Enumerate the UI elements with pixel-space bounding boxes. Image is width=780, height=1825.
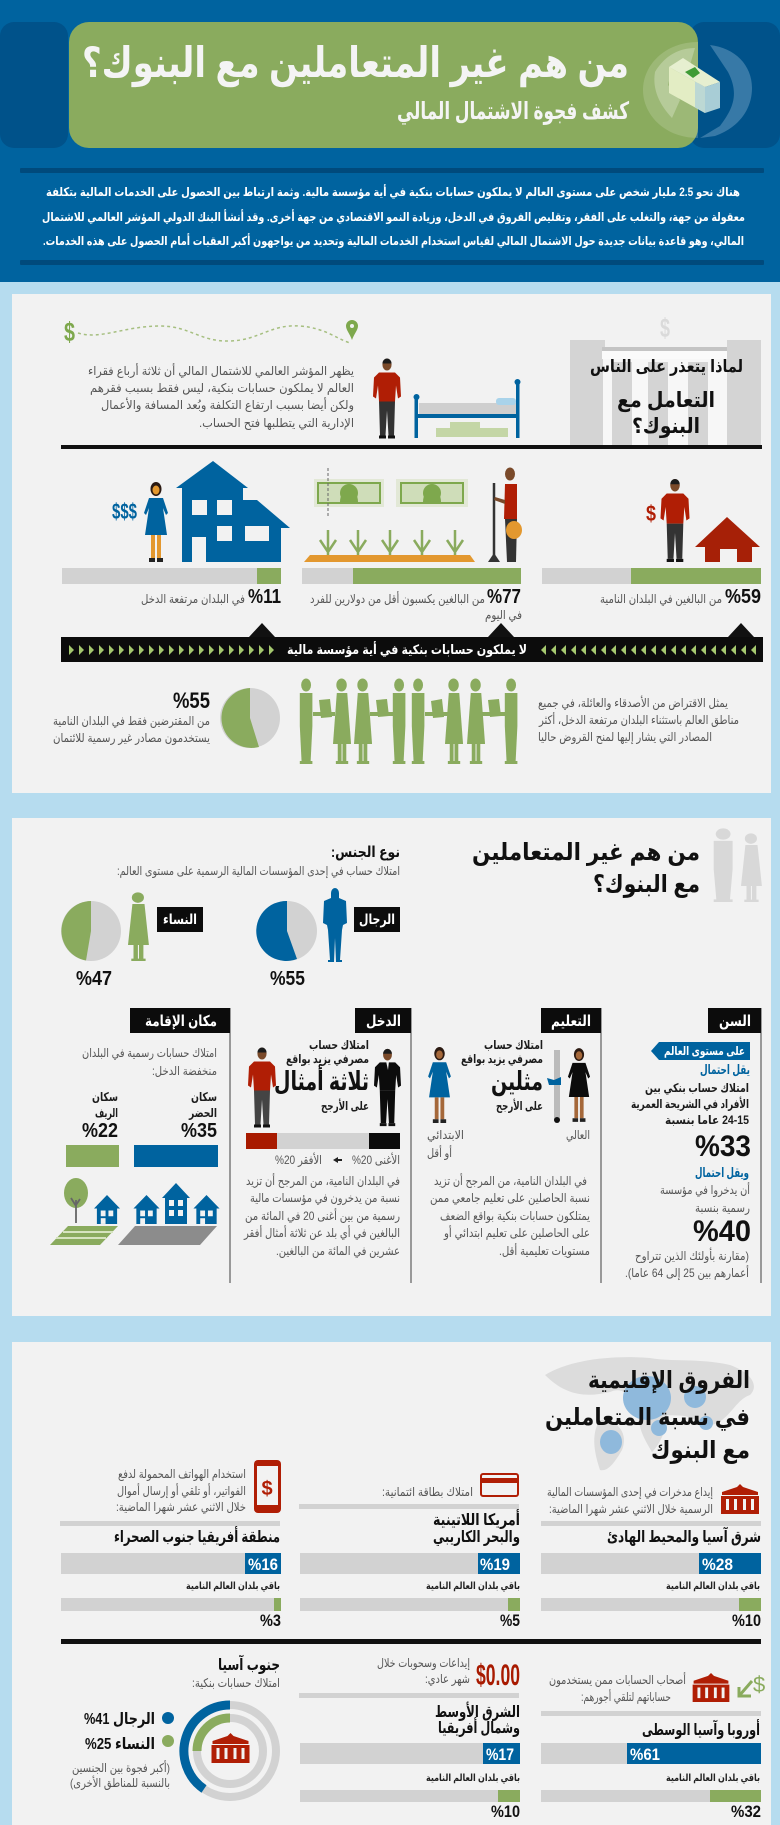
- column: residence: امتلاك حسابات رسمية في البلدان: [82, 1046, 217, 1061]
- icon: woman high income: [144, 482, 168, 562]
- column: age: %33: [695, 1130, 751, 1163]
- paragraph: borrowing from friends: يمثل الاقتراض من الأصدقاء والعائلة، في جميع: [538, 695, 728, 711]
- icon: green dollar and dashed route: [64, 317, 358, 347]
- column: income: الدخل: [366, 1013, 401, 1030]
- column: education: نسبة الحاصلين على تعليم جامعي ممن: [430, 1191, 590, 1206]
- column: age: %40: [693, 1215, 751, 1248]
- gender heading: نوع الجنس:: [331, 844, 400, 861]
- region: europe and central asia: %61: [630, 1745, 660, 1764]
- region: middle east and north africa: %10: [491, 1802, 520, 1821]
- column: age: (مقارنة بأولئك الذين تتراوح: [635, 1247, 749, 1264]
- icon: man in tuxedo: [374, 1049, 401, 1126]
- column: education: في البلدان النامية، من المرجح أن تزيد: [434, 1173, 587, 1189]
- section heading: في نسبة المتعاملين: [545, 1404, 750, 1431]
- column: residence: مكان الإقامة: [145, 1013, 217, 1030]
- icon: dollar arrow: [739, 1672, 765, 1697]
- banner: no bank accounts: لا يملكون حسابات بنكية في أية مؤسسة مالية: [287, 641, 527, 657]
- paragraph: global findex: ولكن أيضا بسبب ارتفاع التكلفة وبُعد المسافة والأعمال: [101, 397, 354, 413]
- paragraph: borrowing from friends: مناطق العالم باستثناء البلدان مرتفعة الدخل، أكثر: [538, 712, 739, 728]
- women stat: [61, 892, 203, 990]
- column: education: التعليم: [551, 1013, 591, 1030]
- column: residence: الريف: [95, 1106, 118, 1120]
- column: residence: سكان: [191, 1090, 217, 1104]
- legend: النساء 25%: [85, 1736, 155, 1753]
- region: sub-saharan africa: خلال الاثني عشر شهرا الماضية:: [116, 1500, 246, 1515]
- column: income: مصرفي يزيد بواقع: [286, 1052, 369, 1067]
- column: education: مثلين: [491, 1066, 543, 1097]
- column: age: أن يدخروا في مؤسسة: [660, 1182, 750, 1198]
- region: middle east and north africa: وشمال أفريقيا: [438, 1717, 520, 1737]
- column: income: [243, 1008, 412, 1283]
- icon: man and small red house: $: [646, 501, 656, 526]
- region: latin america: [299, 1474, 520, 1630]
- region: middle east and north africa: شهر عادي:: [425, 1672, 470, 1687]
- region: south asia: بالنسبة للمناطق الأخرى): [70, 1775, 170, 1791]
- icon: dollar arrow: $: [753, 1672, 765, 1697]
- donut chart: [184, 1705, 276, 1797]
- paragraph: global findex: الإدارية التي يتطلبها فتح الحساب.: [199, 416, 354, 431]
- column: income: في البلدان النامية، من المرجح أن تزيد: [246, 1173, 400, 1189]
- icon: man in red shirt: [373, 358, 401, 438]
- icon: gray dollar: $: [660, 313, 670, 343]
- icon: people exchanging money: [300, 678, 517, 764]
- column: age: [625, 1008, 762, 1283]
- column: income: الأغنى 20%: [352, 1152, 400, 1167]
- bar: 77%: [302, 568, 522, 623]
- bar: 11%: %11: [248, 586, 281, 608]
- bar: 77%: %77: [487, 586, 521, 608]
- column: age: رسمية بنسبة: [695, 1201, 750, 1216]
- column: residence: %35: [181, 1120, 217, 1142]
- region: middle east and north africa: %17: [486, 1745, 514, 1764]
- icon: man and small red house: [646, 479, 760, 562]
- panel: why people cannot use banks: [12, 294, 771, 793]
- icon: gray couple: [714, 828, 762, 902]
- paragraph: global findex: يظهر المؤشر العالمي للاشتمال المالي أن ثلاثة أرباع فقراء: [88, 363, 354, 379]
- column: age: 24-15 عاما بنسبة: [665, 1113, 749, 1127]
- section heading: مع البنوك: [651, 1437, 750, 1464]
- banner: no bank accounts: [61, 623, 763, 662]
- region: east asia pacific: %28: [702, 1555, 733, 1574]
- bar: 11%: في البلدان مرتفعة الدخل: [141, 592, 245, 607]
- header: [0, 0, 780, 282]
- region: europe and central asia: أصحاب الحسابات ممن يستخدمون: [549, 1672, 686, 1688]
- region: east asia pacific: %10: [732, 1611, 761, 1630]
- column: education: على الحاصلين على تعليم ابتدائي أو: [443, 1225, 590, 1241]
- bar: 59%: %59: [725, 586, 761, 608]
- title panel: [69, 22, 698, 148]
- icon: globe with bank notes: [643, 42, 720, 138]
- column: education: مستويات تعليمية أقل.: [499, 1243, 590, 1259]
- icon: mobile phone: [254, 1460, 281, 1513]
- column: residence: [50, 1008, 231, 1283]
- icon: woman higher education: [568, 1048, 590, 1122]
- icon: gray bank building: [570, 340, 761, 445]
- column: residence: الحضر: [188, 1106, 217, 1120]
- column: age: أعمارهم بين 25 إلى 64 عاما).: [625, 1265, 749, 1281]
- panel: regional differences: [12, 1342, 771, 1825]
- region: sub-saharan africa: باقي بلدان العالم النامية: [186, 1581, 280, 1592]
- main title: من هم غير المتعاملين مع البنوك؟: [82, 39, 629, 88]
- region: europe and central asia: حساباتهم لتلقي أجورهم:: [581, 1689, 671, 1705]
- region: south asia: امتلاك حسابات بنكية:: [192, 1676, 280, 1690]
- region: latin america: أمريكا اللاتينية: [433, 1509, 520, 1529]
- column: education: العالي: [566, 1128, 590, 1142]
- gender heading: امتلاك حساب في إحدى المؤسسات المالية الرسمية على مستوى العالم:: [117, 864, 400, 879]
- icon: mobile phone: $: [261, 1478, 273, 1500]
- icon: world map: [545, 1357, 754, 1470]
- bar: 59%: من البالغين في البلدان النامية: [600, 592, 722, 607]
- column: residence: سكان: [92, 1090, 118, 1104]
- section heading: البنوك؟: [632, 415, 700, 438]
- column: education: امتلاك حساب: [484, 1038, 543, 1052]
- section heading: [545, 1367, 750, 1464]
- column: residence: %22: [82, 1120, 118, 1142]
- region: europe and central asia: [541, 1672, 765, 1821]
- column: income: نسبة من يدخرون في مؤسسات مالية: [250, 1191, 400, 1206]
- region: east asia pacific: [541, 1484, 761, 1630]
- column: residence: منخفضة الدخل:: [152, 1064, 217, 1078]
- column: education: يمتلكون حسابات بنكية بواقع الضعف: [440, 1209, 590, 1224]
- stat: 55% informal sources: [53, 688, 210, 746]
- stat: 55% informal sources: يستخدمون مصادر غير رسمية للائتمان: [53, 731, 210, 746]
- region: middle east and north africa: إيداعات وسحوبات خلال: [377, 1656, 470, 1671]
- section heading: لماذا يتعذر على الناس: [590, 357, 743, 376]
- legend: الرجال 41%: [84, 1711, 155, 1728]
- stat: 55% informal sources: %55: [173, 688, 210, 713]
- region: latin america: امتلاك بطاقة ائتمانية:: [382, 1485, 473, 1499]
- intro text: [42, 184, 745, 249]
- column: income: امتلاك حساب: [309, 1038, 369, 1052]
- icon: dollar bills: [314, 468, 468, 516]
- section heading: [590, 357, 743, 438]
- section heading: مع البنوك؟: [593, 871, 700, 898]
- region: sub-saharan africa: استخدام الهواتف المحمولة لدفع: [118, 1467, 246, 1482]
- bar: 77%: في اليوم: [485, 608, 522, 623]
- column: education: الابتدائي: [427, 1128, 464, 1142]
- region: latin america: والبحر الكاريبي: [433, 1529, 520, 1547]
- icon: woman primary education: [428, 1047, 451, 1123]
- region: sub-saharan africa: الفواتير، أو تلقي أو إرسال أموال: [117, 1483, 246, 1499]
- paragraph: borrowing from friends: [538, 695, 739, 745]
- region: middle east and north africa: $0.00: [476, 1659, 520, 1692]
- icon: plants on soil: [304, 530, 475, 562]
- icon: bed with cash under it: [414, 379, 520, 438]
- icon: blue house: [176, 461, 290, 562]
- column: age: امتلاك حساب بنكي بين: [645, 1081, 749, 1095]
- region: south asia: جنوب آسيا: [218, 1654, 280, 1674]
- stat: 55% informal sources: من المقترضين فقط في البلدان النامية: [53, 714, 210, 729]
- paragraph: borrowing from friends: المصادر التي يشار إليها لمنح القروض حاليا: [538, 730, 712, 745]
- column: income: عشرين في المائة من البالغين.: [276, 1244, 400, 1259]
- women stat: النساء: [163, 911, 197, 927]
- icon: poor man: [248, 1048, 276, 1128]
- region: east asia pacific: الرسمية خلال الاثني عشر شهرا الماضية:: [549, 1502, 713, 1517]
- column: age: السن: [719, 1013, 751, 1030]
- region: sub-saharan africa: %16: [248, 1555, 278, 1574]
- region: sub-saharan africa: [60, 1460, 281, 1630]
- icon: urban and rural homes: [50, 1178, 220, 1245]
- bar: 77%: من البالغين يكسبون أقل من دولارين للفرد: [310, 591, 485, 607]
- icon: credit card: [481, 1474, 518, 1496]
- region: middle east and north africa: باقي بلدان العالم النامية: [426, 1773, 520, 1784]
- icon: blue dollars: $$$: [112, 499, 137, 524]
- column: income: ثلاثة أمثال: [274, 1064, 369, 1096]
- icon: green dollar and dashed route: $: [64, 317, 75, 347]
- men stat: [256, 888, 400, 990]
- region: sub-saharan africa: %3: [260, 1611, 281, 1630]
- region: latin america: %5: [500, 1611, 520, 1630]
- column: education: [427, 1008, 602, 1283]
- region: south asia: (أكبر فجوة بين الجنسين: [72, 1760, 170, 1776]
- panel: who are the unbanked: [12, 818, 771, 1316]
- pie chart: 55%: [220, 688, 280, 748]
- paragraph: global findex: [88, 363, 354, 431]
- region: latin america: %19: [480, 1555, 510, 1574]
- column: age: ويقل احتمال: [695, 1165, 749, 1180]
- column: age: يقل احتمال: [700, 1062, 750, 1077]
- region: latin america: باقي بلدان العالم النامية: [426, 1581, 520, 1592]
- bar: 11%: [62, 568, 281, 608]
- column: education: مصرفي يزيد بواقع: [461, 1052, 543, 1067]
- column: income: الأفقر 20%: [275, 1152, 322, 1168]
- men stat: %55: [270, 968, 305, 990]
- section heading: التعامل مع: [617, 389, 715, 412]
- icon: dotted globe on dark band: [700, 45, 752, 138]
- gender heading: [117, 844, 400, 879]
- column: income: على الأرجح: [321, 1098, 369, 1113]
- region: sub-saharan africa: منطقة أفريقيا جنوب الصحراء: [114, 1526, 280, 1546]
- bar: 59%: [542, 568, 761, 608]
- section heading: الفروق الإقليمية: [588, 1367, 750, 1394]
- region: south asia: [70, 1654, 280, 1797]
- column: income: البالغين في أي بلد عن ثلاثة أمثال أفقر: [243, 1225, 400, 1241]
- region: europe and central asia: %32: [731, 1802, 761, 1821]
- legend: [84, 1711, 174, 1753]
- icon: farmer with hoe: [488, 468, 522, 562]
- column: age: على مستوى العالم: [664, 1044, 745, 1059]
- men stat: الرجال: [359, 911, 395, 928]
- column: education: على الأرجح: [496, 1098, 543, 1113]
- column: income: رسمية من بين أغنى 20 في المائة من: [245, 1208, 400, 1224]
- paragraph: global findex: العالم لا يملكون حسابات بنكية، ليس فقط بسبب فقرهم: [90, 381, 354, 396]
- region: east asia pacific: إيداع مدخرات في إحدى المؤسسات المالية: [547, 1485, 713, 1500]
- region: middle east and north africa: الشرق الأوسط: [435, 1702, 520, 1721]
- subtitle: كشف فجوة الاشتمال المالي: [397, 98, 629, 125]
- section heading: [472, 839, 700, 898]
- section heading: من هم غير المتعاملين: [472, 839, 700, 866]
- column: education: أو أقل: [427, 1145, 452, 1161]
- women stat: %47: [76, 968, 112, 990]
- region: middle east and north africa: [299, 1656, 520, 1821]
